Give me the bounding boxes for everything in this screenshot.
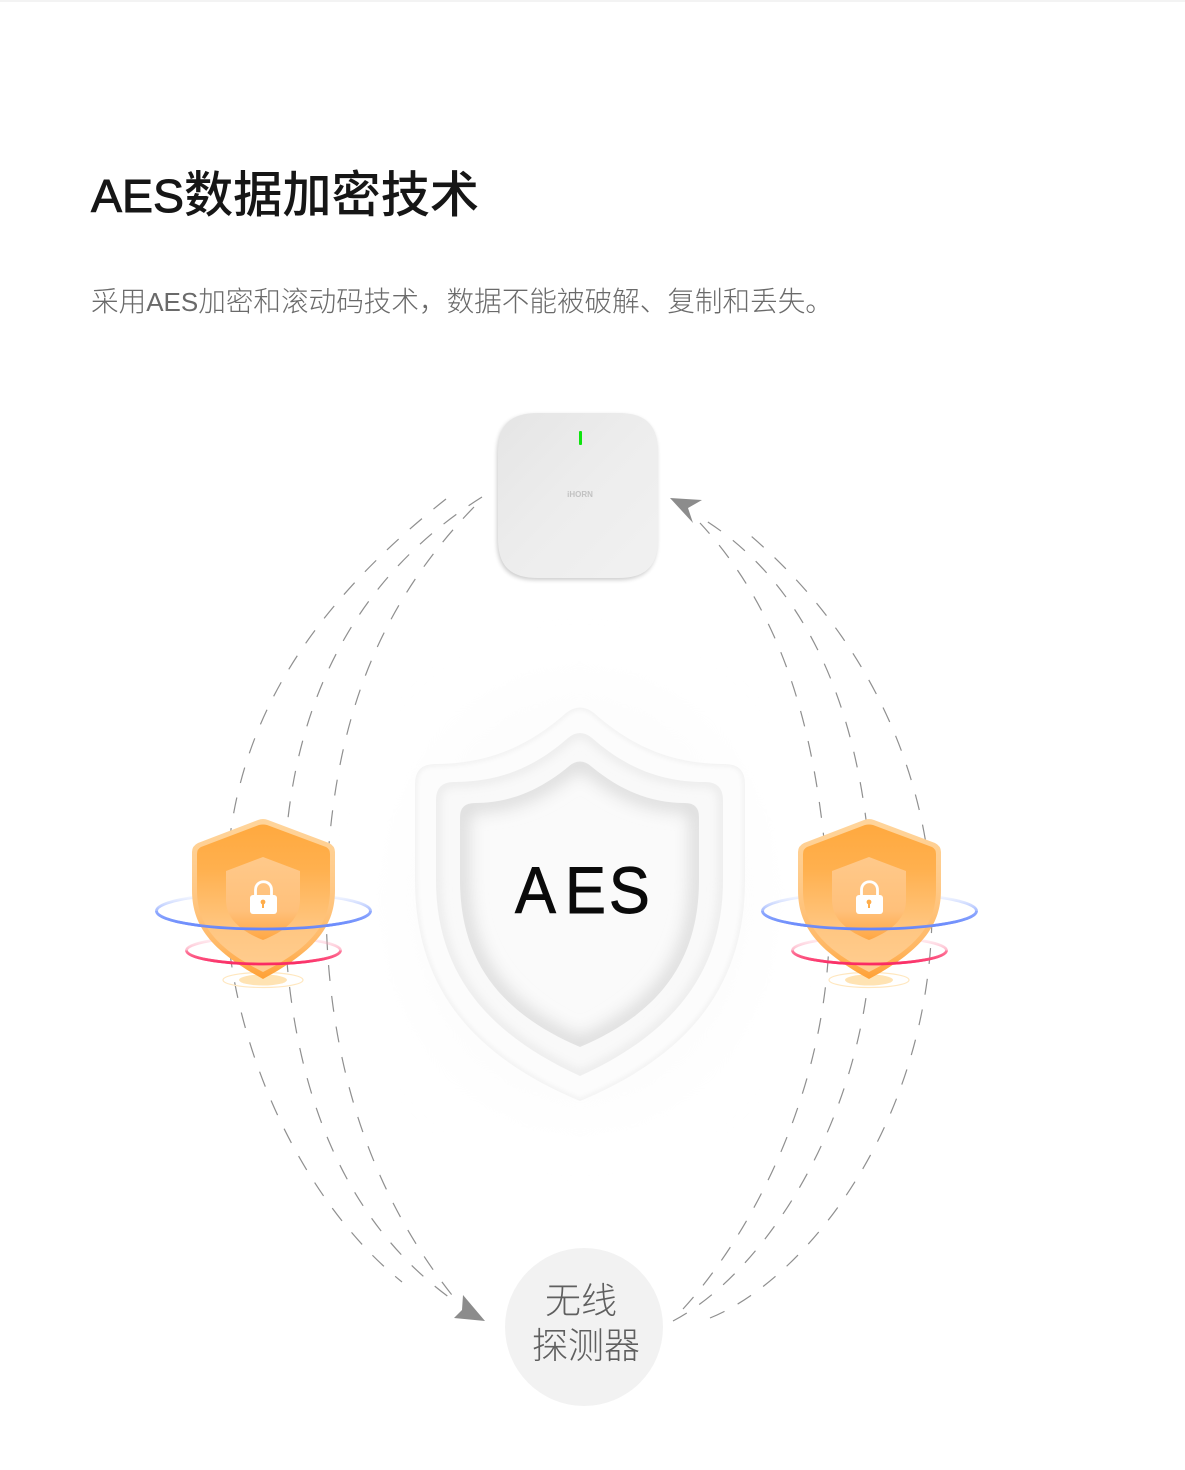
outer shield layer bbox=[415, 708, 745, 1100]
arrow: into device bbox=[670, 498, 702, 523]
wireless detector node bbox=[505, 1248, 663, 1406]
middle shield layer bbox=[436, 733, 723, 1076]
top edge line bbox=[0, 0, 1185, 2]
pink ring rear bbox=[792, 937, 946, 964]
base ring bbox=[829, 972, 909, 988]
pink ring rear bbox=[186, 937, 340, 964]
blue ring front bbox=[762, 911, 976, 929]
shield body bbox=[798, 819, 941, 979]
device status light bbox=[579, 431, 582, 445]
arrow: from detector arcs bbox=[454, 1295, 485, 1321]
detector label: 探测器 bbox=[532, 1325, 640, 1366]
base ring bbox=[223, 972, 303, 988]
inner small shield bbox=[832, 857, 906, 940]
pink ring front bbox=[792, 950, 946, 964]
blue ring rear bbox=[156, 893, 370, 929]
blue ring rear bbox=[762, 893, 976, 929]
shield face bbox=[803, 824, 936, 972]
inner small shield bbox=[226, 857, 300, 940]
central AES shield bbox=[415, 708, 745, 1101]
dashed arcs: right group, detector to device bbox=[673, 517, 932, 1321]
shield face bbox=[197, 824, 330, 972]
title: 数据加密技术 bbox=[184, 168, 479, 223]
pink ring front bbox=[186, 950, 340, 964]
detector label: 无线 bbox=[545, 1280, 617, 1321]
AES label: AES bbox=[515, 853, 650, 927]
shield body bbox=[192, 819, 335, 979]
subtitle: 采用AES加密和滚动码技术，数据不能被破解、复制和丢失。 bbox=[91, 286, 833, 317]
device: wireless gateway bbox=[497, 413, 658, 580]
dashed arcs: left group, detector side to device bbox=[226, 497, 482, 1305]
left orange lock shield bbox=[156, 819, 370, 988]
title: AES bbox=[91, 170, 184, 222]
blue ring front bbox=[156, 911, 370, 929]
right orange lock shield bbox=[762, 819, 976, 988]
inner shield layer bbox=[460, 762, 699, 1047]
lock icon bbox=[250, 882, 277, 914]
lock icon bbox=[856, 882, 883, 914]
device brand: iHORN bbox=[567, 490, 593, 499]
